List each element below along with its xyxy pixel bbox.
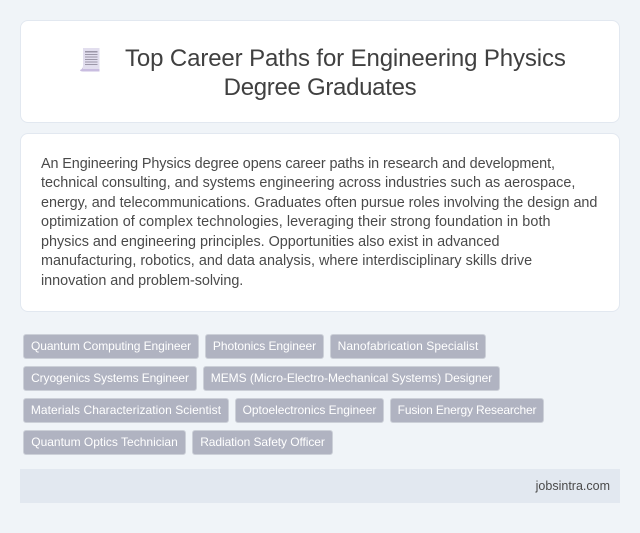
tag xyxy=(23,398,229,423)
tag: Materials Characterization Scientist xyxy=(31,403,221,417)
tag: Radiation Safety Officer xyxy=(200,435,325,449)
title: Degree Graduates xyxy=(224,74,416,101)
tag xyxy=(390,398,544,423)
icon: document scroll xyxy=(80,48,100,72)
tag: Quantum Computing Engineer xyxy=(31,339,191,353)
intro paragraph xyxy=(41,156,597,289)
intro paragraph: physics and engineering principles. Opportunities also exist in advanced xyxy=(41,234,499,250)
career tags xyxy=(23,334,544,455)
title xyxy=(125,45,566,101)
tag: Fusion Energy Researcher xyxy=(398,403,536,417)
footer bar xyxy=(20,469,620,503)
intro paragraph: optimization of complex technologies, leveraging their strong foundation in both xyxy=(41,214,551,230)
tag: Photonics Engineer xyxy=(213,339,316,353)
tag: Optoelectronics Engineer xyxy=(243,403,376,417)
intro paragraph: energy, and telecommunications. Graduates often pursue roles involving the design and xyxy=(41,195,597,211)
tag xyxy=(23,430,186,455)
tag xyxy=(23,334,199,359)
title: Top Career Paths for Engineering Physics xyxy=(125,45,566,72)
header card xyxy=(20,20,620,123)
intro paragraph: innovation and problem-solving. xyxy=(41,273,243,289)
tag xyxy=(330,334,486,359)
footer site name: jobsintra.com xyxy=(536,479,610,493)
tag xyxy=(203,366,500,391)
intro text card xyxy=(20,133,620,312)
tag xyxy=(205,334,324,359)
intro paragraph: manufacturing, robotics, and data analysis, where interdisciplinary skills drive xyxy=(41,253,532,269)
tag xyxy=(235,398,384,423)
tag xyxy=(23,366,197,391)
intro paragraph: An Engineering Physics degree opens career paths in research and development, xyxy=(41,156,555,172)
tag xyxy=(192,430,333,455)
tag: Cryogenics Systems Engineer xyxy=(31,371,189,385)
intro paragraph: technical consulting, and systems engineering across industries such as aerospace, xyxy=(41,175,575,191)
tag: MEMS (Micro-Electro-Mechanical Systems) Designer xyxy=(211,371,492,385)
tag: Nanofabrication Specialist xyxy=(338,339,478,353)
tag: Quantum Optics Technician xyxy=(31,435,178,449)
